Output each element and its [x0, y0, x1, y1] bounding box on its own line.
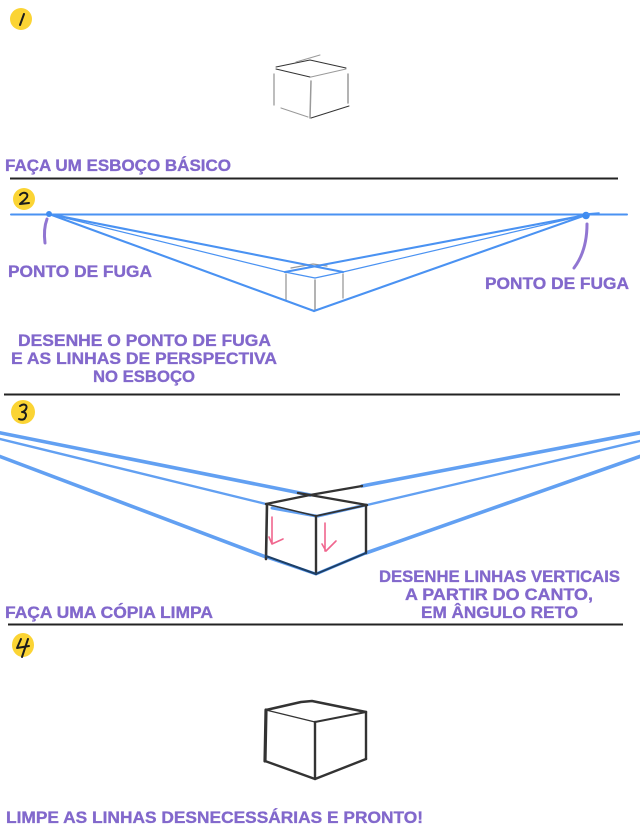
- label: right vanishing point: PONTO DE FUGA: [485, 274, 629, 293]
- sketch cube: [274, 55, 349, 118]
- left vanishing point: [46, 211, 52, 217]
- horizon line: [11, 214, 627, 216]
- caption: vertical lines: EM ÂNGULO RETO: [421, 603, 578, 622]
- panel: step 4: [6, 633, 423, 827]
- label: left vanishing point: PONTO DE FUGA: [8, 262, 152, 281]
- panel: step 1: [5, 8, 349, 175]
- caption: finish: LIMPE AS LINHAS DESNECESSÁRIAS E PRONTO!: [6, 808, 423, 827]
- arrow: left vanishing point pointer: [44, 219, 47, 243]
- arrow: right vanishing point pointer: [574, 224, 587, 268]
- right vanishing point: [582, 212, 599, 219]
- caption: basic sketch: FAÇA UM ESBOÇO BÁSICO: [5, 156, 231, 175]
- blue perspective lines: [0, 432, 640, 574]
- caption: vertical lines: DESENHE LINHAS VERTICAIS: [379, 567, 620, 586]
- icon: number badge 2: [13, 188, 35, 210]
- icon: number badge 1: [10, 8, 32, 30]
- caption: draw vanishing point: E AS LINHAS DE PERSPECTIVA: [11, 349, 277, 368]
- arrow: down, left edge: [269, 517, 283, 544]
- sketch cube under the perspective lines: [286, 264, 343, 310]
- perspective lines from left vanishing point: [49, 214, 343, 311]
- panel: step 2: [8, 188, 629, 386]
- caption: vertical lines: A PARTIR DO CANTO,: [405, 585, 593, 604]
- arrow: down, center edge: [322, 523, 336, 551]
- perspective lines from right vanishing point: [285, 215, 586, 311]
- caption: clean copy: FAÇA UMA CÓPIA LIMPA: [5, 603, 213, 622]
- finished cube: [265, 701, 366, 779]
- caption: draw vanishing point: DESENHE O PONTO DE FUGA: [18, 331, 271, 350]
- caption: draw vanishing point: [11, 331, 277, 386]
- panel: step 3: [0, 400, 640, 622]
- icon: number badge 4: [12, 633, 34, 657]
- clean cube over the lines: [266, 486, 367, 574]
- caption: draw vanishing point: NO ESBOÇO: [93, 367, 195, 386]
- caption: vertical lines: [379, 567, 620, 622]
- icon: number badge 3: [11, 400, 35, 424]
